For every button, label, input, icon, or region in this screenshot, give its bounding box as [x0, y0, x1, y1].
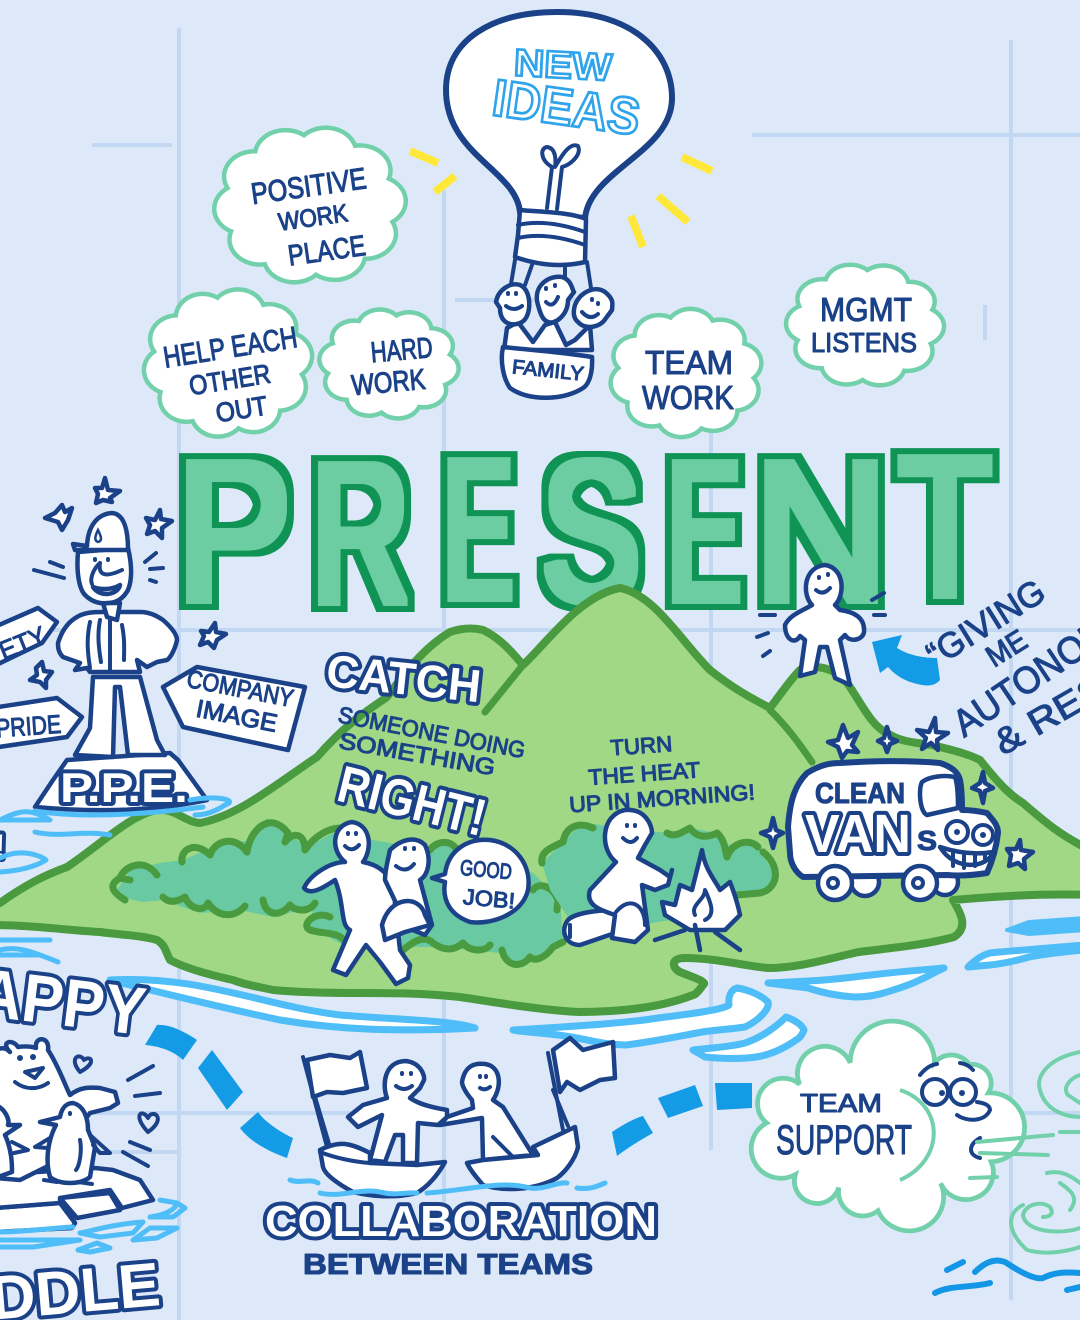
figure: proud person on hill: [757, 565, 885, 685]
text: turn the heat up in morning: TURN: [609, 731, 673, 760]
icon: clean van: [788, 761, 998, 900]
water: bottom right: [935, 1260, 1080, 1293]
stars: around statue: [30, 478, 226, 688]
icon: polar bear and penguins: [0, 1039, 185, 1252]
penguin left: [0, 1105, 20, 1178]
text: catch someone doing something right: [324, 644, 528, 848]
cloud: positive work place: [197, 110, 423, 300]
sign: pride: [0, 698, 82, 748]
hulls: [320, 1144, 445, 1196]
dashed path right: [612, 1083, 752, 1156]
ice: [0, 1203, 75, 1232]
cloud: team support wind face: SUPPORT: [776, 1116, 912, 1163]
text: collaboration between teams: BETWEEN TEAMS: [303, 1249, 593, 1281]
text: collaboration between teams: COLLABORATION: [265, 1197, 657, 1246]
icon: light bulb balloon: FAMILY: [511, 356, 585, 386]
cloud: mgmt listens: LISTENS: [811, 327, 917, 358]
text: collaboration between teams: [265, 1197, 657, 1281]
cloud: help each other out: OTHER: [187, 359, 273, 401]
figure: ppe statue: P.P.E.: [60, 764, 188, 811]
text: giving me autonomy: [920, 572, 1080, 763]
text: turn the heat up in morning: UP IN MORNING!: [568, 779, 756, 817]
cloud: team support wind face: TEAM: [800, 1088, 882, 1118]
water streams: [0, 918, 1080, 1059]
rock: [35, 753, 207, 810]
text: giving me autonomy: “GIVING: [920, 572, 1052, 675]
hearts: [75, 1056, 91, 1072]
title: present: N: [754, 421, 888, 643]
title: present: T: [899, 416, 991, 638]
icon: clean van: CLEAN: [815, 778, 905, 810]
cloud: team work: TEAM: [645, 344, 733, 381]
cloud: team work: WORK: [642, 379, 734, 416]
water: [0, 1200, 185, 1252]
cloud: help each other out: HELP EACH: [161, 321, 300, 375]
cloud: help each other out: [133, 277, 323, 449]
figures: carrying person: [304, 822, 432, 984]
wind swirls: [970, 1052, 1080, 1253]
basket passengers: [496, 277, 612, 350]
cloud: hard work: [298, 291, 480, 437]
basket: [502, 347, 592, 398]
bush: right: [542, 822, 778, 930]
balloon text: new ideas: IDEAS: [489, 69, 644, 147]
text: catch someone doing something right: CATCH: [324, 644, 484, 712]
speech bubble: good job: [432, 840, 529, 923]
cloud: team work: [605, 304, 767, 442]
title: present: P: [177, 421, 291, 643]
island: [0, 588, 1080, 1012]
motion lines: [123, 1066, 160, 1166]
sign: company image: COMPANY: [185, 665, 296, 713]
icon: light bulb balloon: [410, 12, 712, 398]
cloud: mgmt listens: MGMT: [820, 291, 912, 328]
cloud: hard work: HARD: [369, 332, 434, 369]
cloud: mgmt listens: [766, 246, 964, 404]
text: catch someone doing something right: SOMETHING: [337, 727, 497, 780]
flags: [303, 1057, 330, 1147]
water around ppe: [0, 798, 230, 872]
text: turn the heat up in morning: THE HEAT: [587, 757, 701, 790]
head: [77, 548, 131, 603]
icon: clean van: VAN: [805, 804, 911, 864]
figures: [348, 1061, 447, 1163]
title: present: E: [444, 419, 512, 641]
cloud: team support wind face: [751, 1021, 1025, 1231]
speech bubble: good job: JOB!: [462, 884, 516, 914]
bear: [0, 1039, 118, 1180]
cloud: positive work place: POSITIVE: [249, 162, 368, 211]
cloud: positive work place: PLACE: [286, 230, 368, 273]
title: present: E: [668, 421, 740, 643]
cloud: positive work place: WORK: [277, 199, 350, 237]
icon: clean van: S: [917, 825, 937, 856]
title: present: S: [542, 421, 640, 643]
text: giving me autonomy: ME: [980, 624, 1033, 674]
title: present: R: [312, 423, 409, 645]
text: catch someone doing something right: RIGHT!: [332, 755, 492, 848]
figure: person on log: [564, 810, 672, 945]
body: [75, 677, 165, 757]
figure: ppe statue: [34, 513, 207, 811]
title: present: [177, 416, 991, 645]
sign: company image: IMAGE: [194, 695, 280, 738]
balloon text: new ideas: [489, 42, 644, 147]
speech bubble: good job: GOOD: [459, 855, 513, 884]
ridge lines: [485, 665, 812, 762]
text: catch someone doing something right: SOMEONE DOING: [336, 701, 528, 763]
balloon text: new ideas: NEW: [513, 42, 613, 90]
arrow: blue curved: [872, 635, 940, 685]
sign: company image: [163, 665, 305, 750]
yellow rays: [410, 151, 712, 247]
penguin right: [40, 1103, 95, 1183]
bush: left and centre: [113, 818, 563, 967]
cloud: hard work: WORK: [350, 364, 427, 402]
text: turn the heat up in morning: [565, 726, 756, 817]
boats with two figures: [290, 1038, 615, 1196]
dashed path left: [145, 1025, 293, 1158]
icon: campfire: [655, 850, 740, 950]
cloud: help each other out: OUT: [214, 391, 270, 428]
stars: around van: [761, 718, 1033, 869]
